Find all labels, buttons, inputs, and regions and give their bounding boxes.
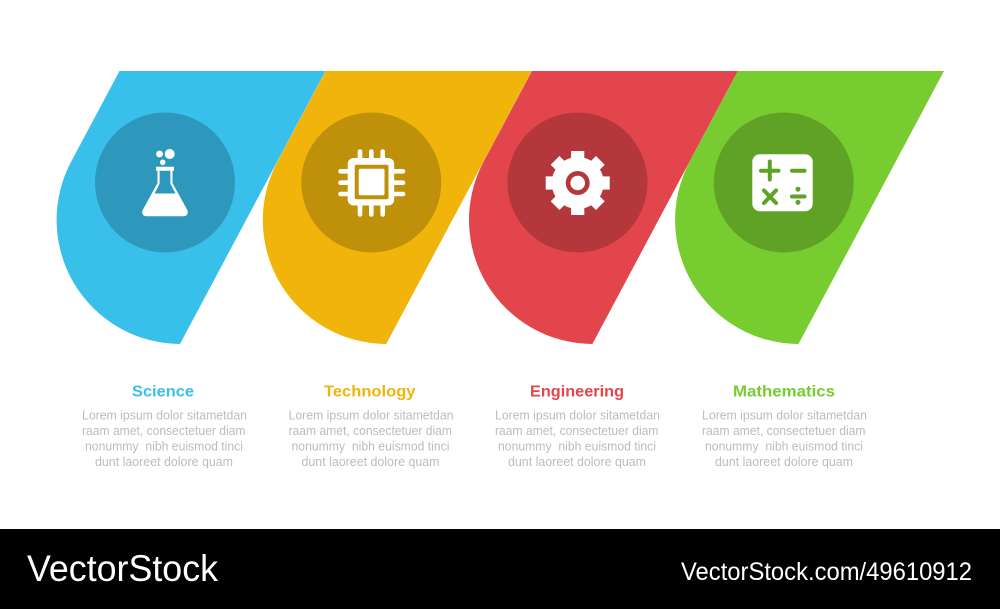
heading: engineering: Engineering xyxy=(530,384,624,400)
body: engineering: nonummy nibh euismod tinci xyxy=(498,440,656,454)
body: mathematics: Lorem ipsum dolor sitametdan xyxy=(702,408,867,422)
heading: science: Science xyxy=(132,384,194,400)
engineering ribbon shape xyxy=(469,71,738,344)
body: science: Lorem ipsum dolor sitametdan xyxy=(82,408,247,422)
text block: engineering xyxy=(495,384,660,469)
body: science: raam amet, consectetuer diam xyxy=(82,424,246,438)
body: technology: Lorem ipsum dolor sitametdan xyxy=(288,408,454,422)
body: mathematics: raam amet, consectetuer diam xyxy=(702,424,866,438)
mathematics icon circle xyxy=(714,112,854,252)
panel: mathematics xyxy=(675,71,944,344)
body: mathematics: nonummy nibh euismod tinci xyxy=(705,440,863,454)
body: engineering: dunt laoreet dolore quam xyxy=(508,455,646,469)
icon: microchip xyxy=(340,152,403,214)
body: science xyxy=(82,408,247,469)
footer logo: VectorStock xyxy=(27,548,218,589)
heading: mathematics: Mathematics xyxy=(733,384,835,400)
science icon circle xyxy=(95,112,235,252)
body: science: nonummy nibh euismod tinci xyxy=(85,440,243,454)
body: engineering xyxy=(495,408,660,469)
body: engineering: Lorem ipsum dolor sitametdan xyxy=(495,408,660,422)
mathematics ribbon shape xyxy=(675,71,944,344)
footer band xyxy=(0,529,1000,609)
panel: engineering xyxy=(469,71,738,344)
technology icon circle xyxy=(301,112,441,252)
panel: technology xyxy=(263,71,532,344)
panel: science xyxy=(57,71,326,344)
heading: technology: Technology xyxy=(324,384,416,400)
body: engineering: raam amet, consectetuer diam xyxy=(495,424,658,438)
body: technology: nonummy nibh euismod tinci xyxy=(292,440,450,454)
icon: gear xyxy=(546,151,610,215)
body: technology: raam amet, consectetuer diam xyxy=(288,424,452,438)
body: science: dunt laoreet dolore quam xyxy=(95,455,233,469)
text block: mathematics xyxy=(702,384,867,469)
body: technology: dunt laoreet dolore quam xyxy=(302,455,440,469)
icon: flask xyxy=(142,149,188,216)
footer url: VectorStock.com/49610912 xyxy=(681,558,972,586)
body: mathematics xyxy=(702,408,867,469)
text block: technology xyxy=(288,384,454,469)
body: mathematics: dunt laoreet dolore quam xyxy=(715,455,853,469)
icon: calculator symbols xyxy=(752,154,813,211)
technology ribbon shape xyxy=(263,71,532,344)
text block: science xyxy=(82,384,247,469)
body: technology xyxy=(288,408,454,469)
science ribbon shape xyxy=(57,71,326,344)
engineering icon circle xyxy=(508,112,648,252)
